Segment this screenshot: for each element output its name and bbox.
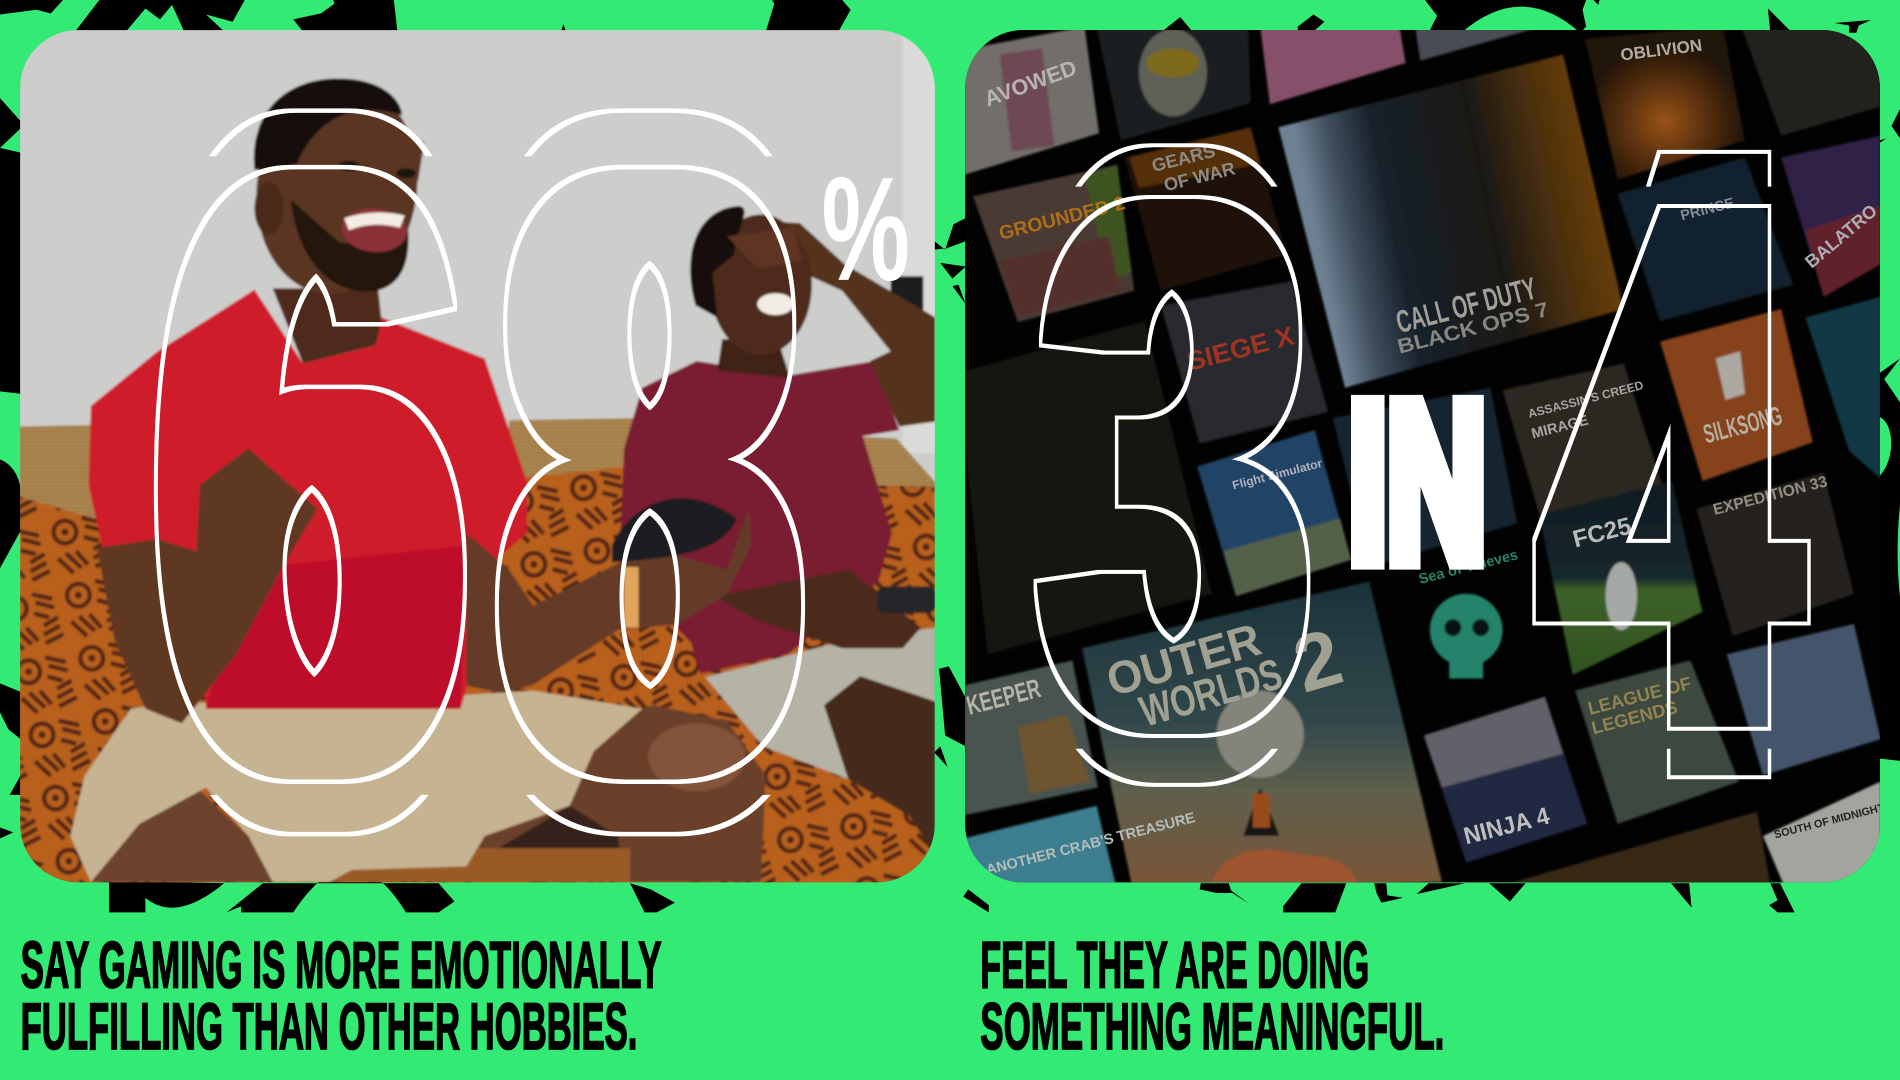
cover titles: SOUTH OF MIDNIGHT bbox=[1773, 802, 1886, 841]
cover: The Sims bbox=[1260, 27, 1406, 104]
cover: Call of Duty bbox=[1278, 55, 1624, 388]
cover: Siege X bbox=[1161, 281, 1328, 443]
cover titles: Sea of Thieves bbox=[1417, 547, 1520, 588]
cover titles: EXPEDITION 33 bbox=[1711, 473, 1829, 519]
cover titles bbox=[963, 36, 1886, 879]
cover titles: SIEGE X bbox=[1184, 321, 1297, 377]
big number 3 in 4 (outlined) bbox=[1047, 0, 1792, 966]
green cut-outs in right splatter bbox=[1879, 417, 1900, 597]
caption: left: FULFILLING THAN OTHER HOBBIES. bbox=[21, 990, 637, 1063]
offset top and bottom caps of 68 bbox=[154, 0, 806, 1037]
cover: Silksong bbox=[1660, 309, 1813, 481]
caption: right: SOMETHING MEANINGFUL. bbox=[980, 990, 1444, 1063]
cover: Flight Simulator bbox=[1197, 430, 1351, 596]
word IN: IN bbox=[1349, 359, 1486, 607]
cover: behind IN bbox=[1333, 388, 1517, 567]
cover titles: BLACK OPS 7 bbox=[1395, 298, 1551, 359]
cover: top sliver bbox=[1414, 30, 1534, 62]
cover: Balatro bbox=[1781, 136, 1881, 297]
patterned sofa cloth bbox=[19, 466, 935, 884]
cover: Prince bbox=[1618, 158, 1793, 321]
cover titles: NINJA 4 bbox=[1461, 802, 1553, 850]
cover: South of Midnight bbox=[1763, 781, 1881, 891]
cover: right teal bbox=[1805, 297, 1881, 479]
cover: Expedition 33 bbox=[1696, 473, 1854, 636]
digit 8 body: 8 bbox=[507, 0, 793, 954]
cover: Outer Worlds 2 bbox=[1082, 582, 1442, 891]
cover titles: GEARS bbox=[1150, 141, 1217, 176]
wall bbox=[19, 29, 937, 514]
cover: Grounded 2 bbox=[973, 165, 1134, 322]
cover titles: BALATRO bbox=[1801, 201, 1881, 272]
cover: Assassin's Creed Mirage bbox=[1503, 363, 1666, 533]
cover titles: SILKSONG bbox=[1700, 400, 1785, 449]
cover: Avowed bbox=[957, 27, 1099, 177]
cover: Knight bbox=[1727, 624, 1881, 775]
cover titles: LEAGUE OF bbox=[1586, 673, 1693, 719]
cover titles: OBLIVION bbox=[1619, 36, 1703, 65]
cover: FC 25 bbox=[1539, 481, 1702, 675]
cover titles: KEEPER bbox=[963, 673, 1044, 721]
cover titles: OF WAR bbox=[1162, 158, 1237, 195]
digit 6 body: 6 bbox=[162, 0, 458, 953]
cover titles: CALL OF DUTY bbox=[1392, 270, 1540, 340]
cover titles: FC25 bbox=[1570, 513, 1634, 553]
cover titles: AVOWED bbox=[981, 55, 1080, 111]
cover titles: MIRAGE bbox=[1530, 413, 1590, 442]
cover: bottom dark bbox=[1484, 812, 1772, 891]
cover: Dead Space bbox=[1741, 27, 1881, 136]
cover: Gears of War bbox=[1124, 127, 1287, 291]
panel: photo of two friends gaming bbox=[19, 29, 937, 884]
cover titles: Flight Simulator bbox=[1231, 456, 1324, 492]
cover: League of Legends bbox=[1575, 660, 1739, 824]
caption: right bbox=[980, 928, 1444, 1063]
cover titles: GROUNDED 2 bbox=[997, 192, 1127, 245]
cover: Ninja Gaiden 4 bbox=[1424, 697, 1587, 863]
cover: Keeper bbox=[957, 660, 1098, 817]
caption: left: SAY GAMING IS MORE EMOTIONALLY bbox=[21, 928, 662, 1001]
cover: Another Crab's Treasure bbox=[963, 806, 1117, 891]
cover titles: LEGENDS bbox=[1589, 697, 1679, 738]
cover titles: ANOTHER CRAB'S TREASURE bbox=[985, 810, 1197, 879]
percent sign: % bbox=[822, 146, 910, 312]
cover titles: WORLDS bbox=[1135, 650, 1288, 737]
digit 4 body: 4 bbox=[1550, 46, 1792, 885]
cover titles: OUTER bbox=[1101, 613, 1267, 706]
caption: left bbox=[21, 928, 662, 1063]
big number 68 (outlined) bbox=[154, 0, 806, 1037]
cover titles: 2 bbox=[1284, 612, 1351, 709]
caption: right: FEEL THEY ARE DOING bbox=[980, 928, 1369, 1001]
panel: grid of game covers bbox=[957, 27, 1886, 891]
cover: Halo bbox=[1097, 27, 1251, 141]
digit 3 body: 3 bbox=[1047, 46, 1303, 885]
wicker sofa back bbox=[20, 416, 935, 520]
second man, laughing bbox=[620, 206, 935, 854]
first man, cheering bbox=[70, 71, 766, 882]
cover: Oblivion bbox=[1585, 27, 1745, 179]
cover: Sea of Thieves skull bbox=[1430, 594, 1503, 679]
cover titles: ASSASSIN'S CREED bbox=[1526, 378, 1645, 421]
dark overlay on covers bbox=[965, 29, 1881, 884]
cover: tall forest bbox=[957, 321, 1212, 654]
cover titles: PRINCE bbox=[1679, 195, 1736, 224]
